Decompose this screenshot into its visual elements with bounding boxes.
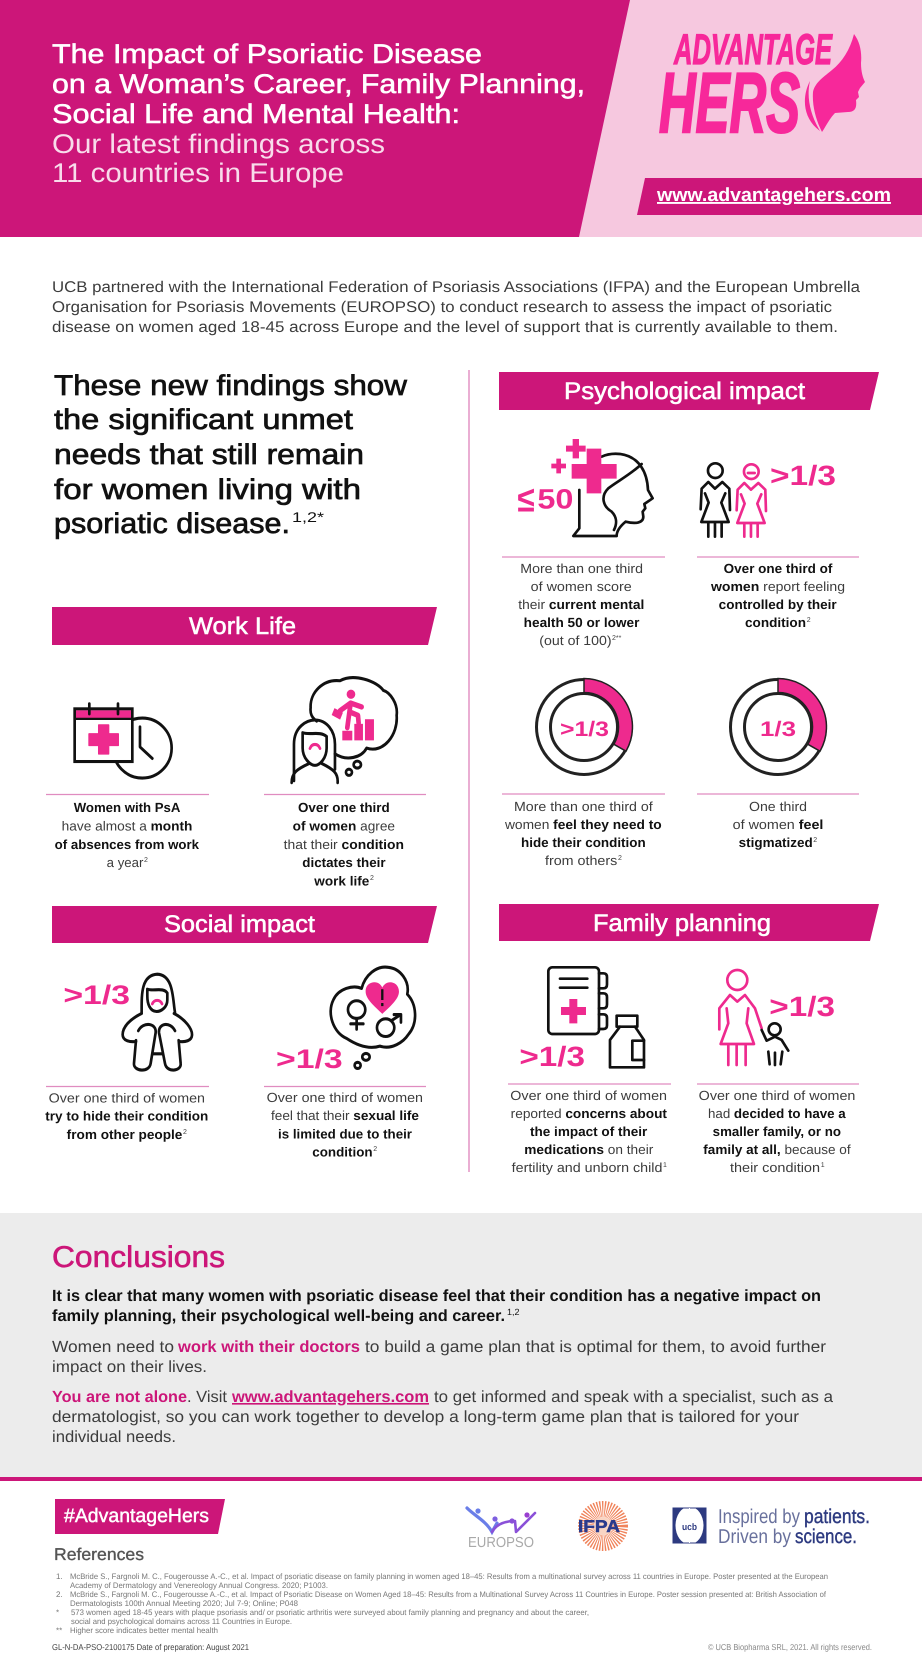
panel: psychological impact	[499, 372, 879, 868]
icon: mother and child: >1/3	[769, 991, 835, 1022]
text: condition dictates work life: Over one third	[298, 800, 390, 815]
icon: ucb mark: ucb	[682, 1522, 697, 1533]
heading: social impact	[52, 906, 437, 943]
title: The Impact of Psoriatic Disease	[52, 39, 482, 69]
text: condition dictates work life: of women agree	[293, 818, 395, 834]
title: 11 countries in Europe	[52, 158, 344, 188]
icon: head with medical crosses	[517, 439, 653, 536]
key message heading	[54, 370, 407, 540]
references list: Academy of Dermatology and Venereology Annual Congress. 2020; P1003.	[70, 1581, 328, 1590]
text: feel stigmatized: 2	[813, 837, 817, 844]
text: smaller family decision: had decided to have a	[708, 1106, 846, 1121]
text: medication concerns: the impact of their	[530, 1124, 647, 1139]
panel: conclusions	[0, 1213, 922, 1481]
key message heading: 1,2*	[292, 509, 325, 525]
text: smaller family decision: 1	[821, 1162, 825, 1169]
text: medication concerns	[510, 1088, 668, 1175]
icon: head with medical crosses: 50	[537, 483, 573, 514]
intro paragraph: Organisation for Psoriasis Movements (EUROPSO) to conduct research to assess the impact of psoriatic	[52, 299, 832, 316]
advice: work with doctors: work with their doctors	[177, 1338, 360, 1356]
text: hiding condition from others	[45, 1090, 208, 1142]
text: feel stigmatized	[733, 799, 823, 850]
icon: calendar with clock	[75, 704, 172, 778]
text: mental health score: More than one third	[520, 561, 643, 576]
logo: EUROPSO	[467, 1508, 535, 1551]
text: smaller family decision	[699, 1088, 855, 1175]
text: condition dictates work life: dictates their	[302, 855, 386, 870]
text: absences from work: 2	[144, 857, 148, 864]
logo: UCB tagline: patients.	[804, 1506, 870, 1528]
text: medication concerns: 1	[663, 1162, 667, 1169]
chart: donut one third	[730, 678, 826, 774]
references list: 573 women aged 18-45 years with plaque psoriasis and/ or psoriatic arthritis were surveyed about family planning and pregnancy and about the career,	[71, 1608, 589, 1617]
text: condition dictates work life: 2	[370, 875, 374, 882]
logo: Advantage Hers	[659, 26, 865, 151]
conclusion statement: family planning, their psychological well-being and career.	[52, 1307, 505, 1325]
advice: work with doctors	[52, 1338, 827, 1376]
intro paragraph: disease on women aged 18-45 across Europe and the level of support that is currently available to them.	[52, 319, 838, 336]
icon: mother and child	[719, 970, 835, 1065]
key message heading: the significant unmet	[54, 404, 353, 436]
advice: you are not alone: individual needs.	[52, 1428, 176, 1446]
text: feel stigmatized: One third	[749, 799, 807, 814]
text: condition dictates work life	[284, 800, 404, 888]
icon: two women: >1/3	[770, 460, 836, 491]
text: medication concerns: medications on their	[524, 1142, 654, 1157]
text: smaller family decision: their condition	[730, 1160, 820, 1175]
advice: you are not alone	[52, 1388, 833, 1446]
icon: two women	[701, 460, 836, 537]
text: hide condition	[504, 799, 662, 868]
text: sexual life limited: 2	[373, 1146, 377, 1153]
text: controlled by condition	[710, 561, 845, 630]
header banner	[0, 0, 922, 237]
text: smaller family decision: smaller family, or no	[713, 1124, 841, 1139]
heading: family planning: Family planning	[593, 910, 771, 937]
text: feel stigmatized: of women feel	[733, 817, 823, 832]
logo: IFPA	[578, 1509, 620, 1543]
title	[52, 39, 585, 188]
icon: sitting woman: >1/3	[63, 980, 130, 1010]
website link band	[637, 178, 922, 215]
text: controlled by condition: women report feeling	[710, 579, 845, 594]
title: Our latest findings across	[52, 129, 385, 159]
conclusion statement: 1,2	[507, 1307, 520, 1317]
key message heading: These new findings show	[54, 370, 407, 402]
text: mental health score: their current mental	[518, 597, 644, 612]
text: hide condition: women feel they need to	[504, 817, 662, 832]
text: controlled by condition: condition	[745, 615, 806, 630]
text: sexual life limited: condition	[312, 1144, 373, 1160]
text: controlled by condition: Over one third of	[724, 561, 833, 576]
logo: UCB tagline: Inspired by	[718, 1506, 800, 1528]
references list: **	[56, 1626, 62, 1635]
text: sexual life limited: is limited due to their	[278, 1126, 412, 1142]
text: condition dictates work life: that their condition	[284, 837, 404, 852]
text: mental health score: health 50 or lower	[524, 615, 639, 630]
hashtag badge	[55, 1499, 225, 1534]
icon: medical notebook and bottle: >1/3	[519, 1041, 585, 1072]
text: hiding condition from others: from other people	[67, 1127, 182, 1142]
icon: ucb mark	[673, 1506, 706, 1544]
references list: 2.	[56, 1590, 63, 1599]
key message heading: for women living with	[54, 474, 361, 506]
text: hiding condition from others: try to hide their condition	[45, 1108, 208, 1124]
key message heading: needs that still remain	[54, 439, 364, 471]
text: medication concerns: fertility and unborn child	[512, 1160, 662, 1175]
text: absences from work: a year	[107, 855, 144, 870]
text: sexual life limited: Over one third of women	[267, 1090, 423, 1105]
text: medication concerns: Over one third of women	[510, 1088, 667, 1103]
heading: family planning	[499, 904, 879, 941]
logo: UCB tagline: Driven by	[718, 1526, 791, 1548]
icon: thought bubble with gender symbols and heart	[276, 967, 415, 1074]
text: smaller family decision: Over one third of women	[699, 1088, 855, 1103]
text: absences from work: Women with PsA	[74, 800, 181, 815]
icon: head with medical crosses: ≤	[517, 479, 535, 519]
text: controlled by condition: 2	[807, 617, 811, 624]
chart: donut more than one third: >1/3	[560, 718, 609, 741]
text: sexual life limited	[267, 1090, 423, 1160]
references list: Dermatologists 100th Annual Meeting 2020; Jul 7-9; Online; P048	[70, 1599, 299, 1608]
text: sexual life limited: feel that their sexual life	[271, 1108, 419, 1123]
text: condition dictates work life: work life	[313, 874, 369, 888]
title: Social Life and Mental Health:	[52, 99, 460, 129]
advice: work with doctors: impact on their lives.	[52, 1358, 207, 1376]
heading: conclusions: Conclusions	[52, 1241, 225, 1274]
text: hide condition: hide their condition	[521, 835, 646, 850]
text: mental health score: 2**	[612, 635, 622, 642]
advice: work with doctors: to build a game plan that is optimal for them, to avoid further	[365, 1338, 827, 1356]
text: controlled by condition: controlled by their	[719, 597, 837, 612]
advice: you are not alone: www.advantagehers.com	[231, 1388, 429, 1406]
logo: UCB tagline: science.	[795, 1526, 857, 1548]
logo: Advantage Hers: HERS	[659, 56, 800, 151]
panel: family planning	[499, 904, 879, 1175]
intro paragraph	[52, 279, 860, 336]
text: medication concerns: reported concerns about	[511, 1106, 668, 1121]
references list	[56, 1572, 828, 1635]
text: feel stigmatized: stigmatized	[739, 835, 813, 850]
icon: thought bubble with gender symbols and heart: >1/3	[276, 1044, 343, 1074]
text: hide condition: from others	[545, 853, 618, 868]
heading: psychological impact	[499, 372, 879, 410]
key message heading: psoriatic disease.	[54, 508, 290, 540]
advice: you are not alone: to get informed and speak with a specialist, such as a	[434, 1388, 833, 1406]
references list: *	[56, 1608, 59, 1617]
text: mental health score: of women score	[531, 579, 632, 594]
intro paragraph: UCB partnered with the International Federation of Psoriasis Associations (IFPA) and the European Umbrella	[52, 279, 860, 296]
icon: sitting woman	[63, 974, 192, 1070]
references list: McBride S., Fargnoli M. C., Fougerousse A.-C., et al. Impact of Psoriatic Disease on Women Aged 18–45: Results from a Multinational Survey Across 11 Countries in Europe. Poster session presented at: British Association of	[70, 1590, 827, 1599]
hashtag badge: #AdvantageHers	[64, 1505, 209, 1527]
title: on a Woman’s Career, Family Planning,	[52, 69, 585, 99]
text: mental health score	[518, 561, 644, 648]
logo: IFPA: IFPA	[578, 1517, 620, 1536]
advice: you are not alone: You are not alone	[52, 1388, 187, 1406]
heading: social impact: Social impact	[164, 911, 315, 938]
text: hide condition: More than one third of	[514, 799, 653, 814]
heading: work life	[52, 607, 437, 645]
text: hiding condition from others: 2	[183, 1129, 187, 1136]
panel: work life	[46, 607, 437, 888]
icon: medical notebook and bottle	[519, 967, 644, 1072]
advice: you are not alone: . Visit	[187, 1388, 227, 1406]
references heading: References	[54, 1545, 144, 1564]
text: absences from work	[55, 800, 200, 870]
heading: work life: Work Life	[189, 613, 296, 640]
chart: donut one third: 1/3	[760, 718, 796, 741]
icon: woman thinking about career	[292, 678, 397, 783]
conclusion statement: It is clear that many women with psoriatic disease feel that their condition has a negative impact on	[52, 1287, 821, 1305]
document code: GL-N-DA-PSO-2100175 Date of preparation: August 2021	[52, 1642, 249, 1652]
text: absences from work: of absences from work	[55, 837, 200, 852]
conclusion statement	[52, 1287, 821, 1325]
text: hide condition: 2	[618, 855, 622, 862]
text: mental health score: (out of 100)	[539, 633, 612, 648]
website link band: www.advantagehers.com	[656, 185, 891, 206]
advice: you are not alone: dermatologist, so you can work together to develop a long-term game plan that is tailored for your	[52, 1408, 800, 1426]
text: smaller family decision: family at all, because of	[703, 1142, 851, 1157]
references list: 1.	[56, 1572, 63, 1581]
advice: work with doctors: Women need to	[52, 1338, 174, 1356]
references list: Higher score indicates better mental health	[70, 1626, 218, 1635]
logo: UCB tagline	[673, 1506, 870, 1548]
chart: donut more than one third	[536, 678, 632, 774]
text: absences from work: have almost a month	[62, 818, 192, 834]
heading: psychological impact: Psychological impact	[564, 378, 805, 405]
references list: McBride S., Fargnoli M. C., Fougerousse A.-C., et al. Impact of psoriatic disease on family planning in women aged 18–45: Results from a multinational survey across 11 countries in Europe. Poster presented at the European	[70, 1572, 828, 1581]
panel: social impact	[45, 906, 437, 1160]
column divider	[468, 370, 470, 1172]
text: hiding condition from others: Over one third of women	[49, 1090, 205, 1106]
references list: social and psychological domains across 11 Countries in Europe.	[71, 1617, 292, 1626]
logo: EUROPSO: EUROPSO	[468, 1535, 534, 1551]
copyright: © UCB Biopharma SRL, 2021. All rights reserved.	[708, 1642, 872, 1652]
